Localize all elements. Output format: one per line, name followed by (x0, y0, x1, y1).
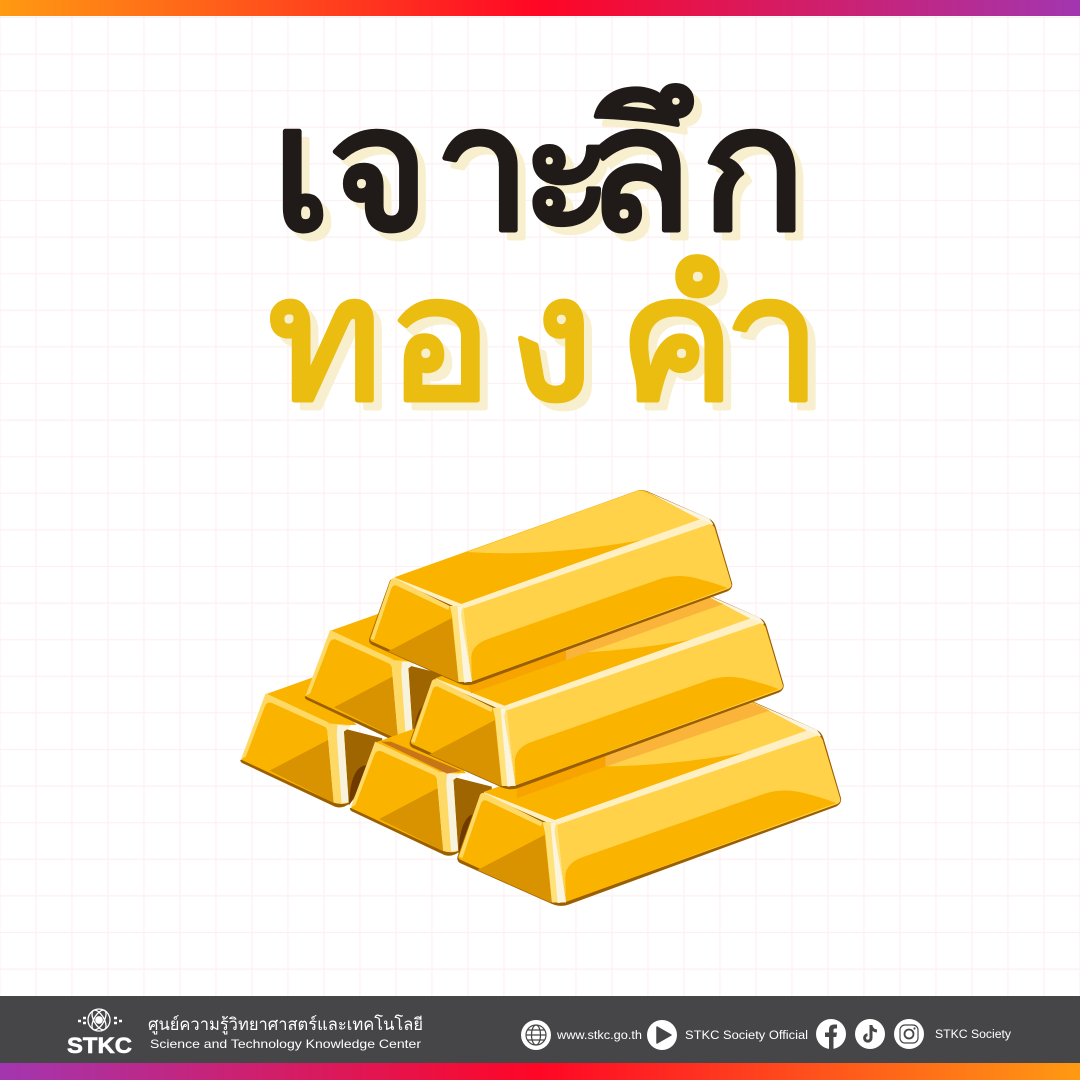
icon: instagram (894, 1019, 924, 1049)
title: line 2: ง (508, 242, 594, 438)
title: line 1: า (433, 72, 532, 268)
organisation name: Science and Technology Knowledge Center (150, 1037, 421, 1051)
gold bar: middle (410, 588, 784, 789)
title: line 2 shadow: อ (395, 250, 501, 446)
gold bar: front large (457, 700, 841, 906)
shadow on large bar (517, 703, 770, 798)
title: line 1 shadow: ก (708, 80, 815, 276)
title: line 2 shadow: ท (275, 250, 391, 446)
title: line 1: ลึ (585, 72, 693, 268)
icon: tiktok (855, 1019, 885, 1049)
icon: facebook (816, 1019, 846, 1049)
title: line 2: ค (618, 242, 736, 438)
logo: wordmark: STKC (67, 1033, 132, 1058)
title: line 1 shadow: า (441, 80, 540, 276)
title: line 2 shadow: ำ (685, 250, 830, 446)
organisation name (148, 1014, 423, 1051)
title: line 2 shadow: ง (516, 250, 602, 446)
title: line 1 shadow: ะ (528, 80, 623, 276)
top gradient bar (0, 0, 1080, 16)
title: line 1 shadow: เ (279, 80, 339, 276)
website text: www.stkc.go.th (556, 1030, 642, 1042)
title: line 1 shadow: ลึ (593, 80, 701, 276)
title: line 1: ก (700, 72, 807, 268)
title: line 2: ำ (677, 242, 822, 438)
instagram text: STKC Society (935, 1029, 1011, 1041)
title: line 2 shadow: ค (626, 250, 744, 446)
organisation name: ศูนย์ความรู้วิทยาศาสตร์และเทคโนโลยี (148, 1014, 423, 1035)
gold bar: back centre lower (350, 725, 492, 856)
icon: play (647, 1020, 677, 1050)
icon: globe (521, 1020, 551, 1050)
title: line 2: ท (267, 242, 383, 438)
title: line 1: จ (327, 72, 430, 268)
title: line 2: อ (387, 242, 493, 438)
title: line 1: ะ (520, 72, 615, 268)
youtube text: STKC Society Official (685, 1030, 808, 1042)
logo: atom mark (78, 1008, 122, 1032)
title: line 1 shadow: จ (335, 80, 438, 276)
gold bar: back left upper (305, 613, 447, 744)
gold bar: back left lower (240, 677, 382, 807)
bottom gradient bar (0, 1063, 1080, 1080)
shadow on middle bar (467, 595, 723, 693)
title: line 1: เ (271, 72, 331, 268)
icon: stack of gold bars (240, 490, 841, 906)
logo: STKC (67, 1008, 132, 1058)
gold bar: top (369, 490, 732, 685)
footer band (0, 996, 1080, 1063)
